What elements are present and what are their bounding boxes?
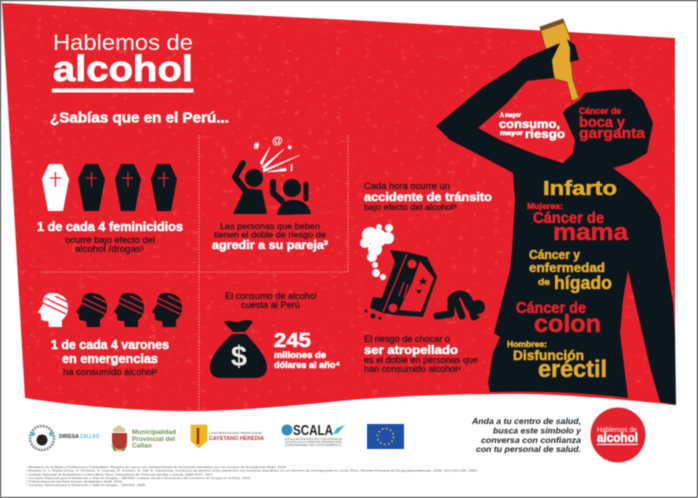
label: disfunción eréctil — [507, 340, 607, 383]
text: atropellado: El riesgo de chocar o — [364, 334, 450, 344]
title — [52, 30, 194, 92]
text: agresión — [212, 221, 328, 252]
callout: a mayor consumo: consumo, — [499, 117, 560, 131]
icon: couple fighting: ! — [290, 163, 293, 173]
icon: couple fighting: # — [254, 141, 259, 151]
panel: varones en emergencias — [38, 293, 182, 377]
stat: 245 millones: millones de — [274, 350, 326, 361]
logo: SCALA: SCALA — [293, 422, 333, 439]
panel: costo económico — [210, 291, 340, 378]
icon: four bandaged heads — [38, 293, 182, 327]
label: disfunción eréctil: eréctil — [538, 356, 607, 383]
logo: DIRESA Callao — [30, 426, 100, 450]
panel: accidente de tránsito — [360, 181, 492, 374]
label: cáncer de colon — [516, 300, 601, 338]
label: disfunción eréctil: Hombres: — [507, 340, 547, 349]
label: cáncer y enfermedad de hígado — [529, 247, 612, 293]
text: atropellado — [364, 334, 478, 374]
logo: Universidad Cayetano Heredia: CAYETANO HEREDIA — [209, 436, 264, 442]
icon: overturned car with smoke — [360, 224, 485, 320]
text: varones — [51, 337, 169, 377]
text: atropellado: es el doble en personas que — [364, 355, 478, 365]
icon: bottle — [540, 19, 579, 101]
text: accidente: accidente de tránsito — [364, 190, 492, 204]
title: alcohol — [53, 48, 193, 89]
stat: 245 millones — [274, 330, 340, 371]
text: feminicidios: 1 de cada 4 feminicidios — [37, 220, 183, 234]
footnotes: ⁵ Policía Nacional del Perú Anuario Estadístico 2018, 2019. — [26, 480, 123, 484]
logo: Municipalidad de Callao: Provincial del — [132, 437, 175, 443]
icon: couple fighting: * — [288, 144, 292, 154]
text: varones: ha consumido alcohol² — [63, 367, 157, 377]
label: cáncer de mama: Mujeres: — [527, 202, 563, 211]
footnotes: ⁶ Comisión Nacional para el Desarrollo y Vida sin Drogas – DEVIDA, 2008 — [26, 483, 145, 487]
text: atropellado: ser atropellado — [364, 343, 458, 357]
icon: run-over person — [437, 294, 485, 318]
stat: 245 millones: 245 — [274, 330, 311, 352]
logo: DIRESA Callao: CALLAO — [80, 434, 100, 440]
logo: SCALA: COMUNIDADES EN LATINOAMÉRICA — [285, 444, 342, 447]
label: cáncer de mama: Cáncer de — [533, 210, 604, 227]
footnotes — [26, 465, 477, 487]
text: costo intro — [225, 291, 317, 310]
icon: drinking silhouette — [436, 43, 676, 405]
label: cáncer de colon: Cáncer de — [516, 300, 586, 317]
text: agresión: tienen el doble de riesgo de — [214, 230, 326, 240]
logo: SCALA: ALCOHOL EN LA ATENCIÓN PRIMARIA PARA — [285, 441, 343, 444]
logo: Municipalidad de Callao: Callao — [132, 444, 152, 450]
panel: feminicidios — [37, 164, 183, 254]
icon: four coffins — [42, 164, 177, 211]
callout: a mayor consumo: riesgo — [525, 127, 565, 141]
text: anda a tu centro de salud: busca este símbolo y — [493, 426, 582, 436]
text: feminicidios: ocurre bajo efecto del — [65, 235, 155, 245]
label: cáncer y enfermedad de hígado: enfermedad — [529, 260, 605, 275]
heading: sabías que: ¿Sabías que en el Perú... — [50, 110, 229, 126]
logo: Municipalidad de Callao — [111, 425, 176, 452]
text: feminicidios — [37, 220, 183, 254]
logo: hablemos de alcohol badge: alcohol — [597, 430, 638, 445]
label: cáncer y enfermedad de hígado: Cáncer y — [529, 247, 581, 262]
text: varones: 1 de cada 4 varones — [51, 337, 169, 352]
panel: agresión a la pareja — [212, 135, 328, 252]
grid dividers — [41, 135, 348, 410]
icon: couple fighting: @ — [272, 135, 283, 147]
text: anda a tu centro de salud: con tu personal de salud. — [476, 444, 581, 454]
text: anda a tu centro de salud: Anda a tu centro de salud, — [471, 416, 581, 426]
label: cáncer y enfermedad de hígado: hígado — [554, 273, 612, 293]
text: accidente: bajo efecto del alcohol⁵ — [364, 202, 457, 212]
logo: hablemos de alcohol badge: Hablemos de — [597, 427, 637, 434]
label: cáncer de boca y garganta — [579, 106, 646, 142]
label: cáncer de boca y garganta: boca y — [579, 115, 625, 131]
text: costo intro: cuesta al Perú — [241, 300, 300, 310]
footnotes: ² Rosario G, L. Rojas-Urrea, G. Fimbres, S. Cuevas, R. Frosten, D. Gill, S. Cardoning. Consumo de alcohol entre pacientes con lesiones atendidos en un servicio de emergencias en Lima, Perú, Revista Peruana de Drogodependencias, 2006; 4(1):134-156, 2006 — [26, 468, 477, 472]
logo: SCALA — [282, 422, 345, 447]
label: infarto: Infarto — [543, 178, 617, 200]
text: agresión: Las personas que beben — [220, 221, 320, 231]
text: atropellado: han consumido alcohol⁶ — [364, 364, 461, 374]
stat: 245 millones: dólares al año⁴ — [274, 360, 340, 371]
label: cáncer de boca y garganta: garganta — [579, 126, 646, 142]
label: cáncer de mama: mama — [553, 219, 629, 246]
label: cáncer y enfermedad de hígado: de — [538, 277, 550, 287]
footnotes: ³ Instituto Nacional de Estadística e Informática. Perú: Indicadores de Violencia familiar y sexual, 2009-2017, 2017 — [26, 472, 213, 476]
text: varones: en emergencias — [62, 351, 158, 366]
footnotes: ⁴ Comisión Nacional para el Desarrollo y Vida sin Drogas – DEVIDA. Impacto Social y Económico del Consumo de Drogas en el Perú, 2013 — [26, 476, 250, 480]
label: cáncer de boca y garganta: Cáncer de — [579, 106, 621, 116]
callout: a mayor consumo: mayor — [500, 130, 524, 137]
label: cáncer de mama — [527, 202, 629, 246]
text: anda a tu centro de salud: conversa con confianza — [481, 435, 581, 445]
text: agresión: agredir a su pareja³ — [212, 238, 328, 252]
logo: hablemos de alcohol badge — [590, 408, 646, 462]
logo: DIRESA Callao: DIRESA — [59, 434, 79, 440]
footnotes: ¹ Ministerio de la Mujer y Poblaciones Vulnerables. Registro de casos con características de feminicidio atendidos por los Centros de Emergencia Mujer, 2018. — [26, 465, 287, 469]
callout: a mayor consumo — [499, 112, 565, 141]
title: Hablemos de — [53, 30, 193, 55]
callout: a mayor consumo: A mayor — [500, 112, 521, 119]
logo: Universidad Cayetano Heredia — [191, 425, 264, 448]
logo: Municipalidad de Callao: Municipalidad — [132, 430, 176, 436]
icon: money bag: $ — [231, 341, 247, 373]
logo: European Union flag — [367, 424, 404, 449]
label: cáncer de colon: colon — [534, 310, 601, 338]
text: anda a tu centro de salud — [471, 416, 582, 454]
text: accidente — [364, 181, 492, 212]
logo: Universidad Cayetano Heredia: UNIVERSIDAD PERUANA — [209, 431, 262, 435]
text: costo intro: El consumo de alcohol — [225, 291, 317, 301]
icon: fingers on bottle — [567, 39, 579, 62]
text: accidente: Cada hora ocurre un — [364, 181, 450, 191]
icon: couple fighting — [233, 135, 311, 215]
label: disfunción eréctil: Disfunción — [513, 347, 584, 363]
text: feminicidios: alcohol /drogas¹ — [75, 244, 144, 254]
logo: SCALA: ESCALA DE INTERVENCIÓN COMUNITARIA DE — [285, 438, 343, 441]
